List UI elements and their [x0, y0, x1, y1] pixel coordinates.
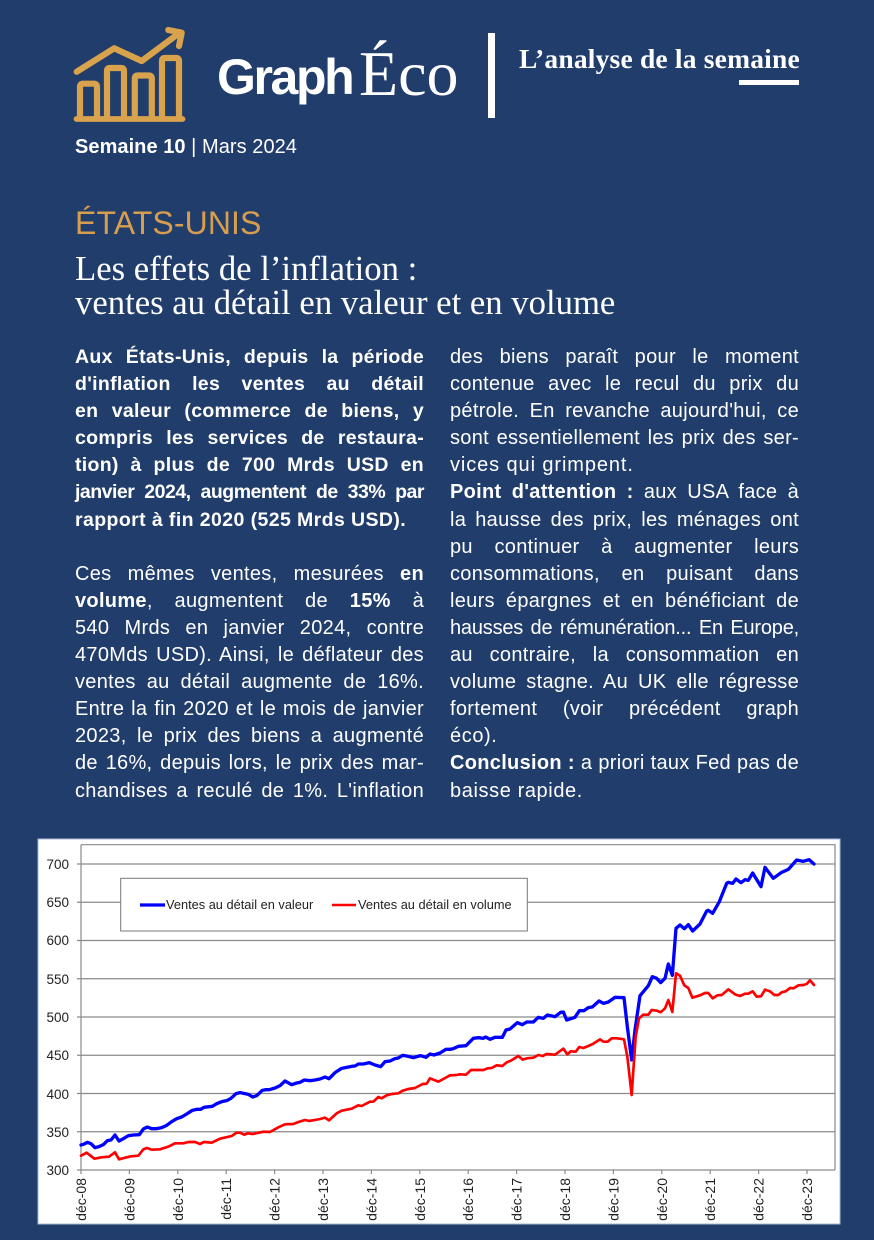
legend [121, 878, 527, 931]
y axis labels: 300 [46, 1163, 69, 1178]
x axis labels: déc-23 [799, 1178, 815, 1221]
y axis labels [46, 857, 69, 1178]
section heading: ÉTATS-UNIS [75, 205, 261, 241]
lead paragraph: rapport à fin 2020 (525 Mrds USD). [75, 509, 406, 531]
body paragraph: 540 Mrds en janvier 2024, contre [75, 617, 424, 639]
conclusion paragraph: Conclusion : a priori taux Fed pas de [450, 752, 799, 774]
body paragraph: Entre la fin 2020 et le mois de janvier [75, 698, 424, 720]
body paragraph: 470Mds USD). Ainsi, le déflateur des [75, 644, 424, 666]
point of attention paragraph: au contraire, la consommation en [450, 644, 799, 666]
point of attention paragraph: volume stagne. Au UK elle régresse [450, 671, 799, 693]
logo wordmark: Éco [359, 38, 458, 109]
inflation paragraph: sont essentiellement les prix des ser- [450, 427, 799, 449]
inflation paragraph: contenue avec le recul du prix du [450, 373, 799, 395]
point of attention paragraph: leurs épargnes et en bénéficiant de [450, 590, 799, 612]
y axis labels: 700 [46, 857, 69, 872]
x axis labels: déc-11 [218, 1178, 234, 1220]
logo wordmark [217, 38, 458, 109]
body paragraph: Ces mêmes ventes, mesurées en [75, 563, 424, 585]
x axis labels: déc-15 [412, 1178, 428, 1221]
y axis labels: 650 [46, 895, 69, 910]
y axis labels: 350 [46, 1125, 69, 1140]
text column: right [450, 346, 799, 802]
grid lines [77, 845, 835, 1174]
lead paragraph [74, 346, 424, 531]
x axis labels: déc-14 [363, 1178, 379, 1221]
x axis labels: déc-08 [73, 1178, 89, 1221]
x axis labels: déc-10 [170, 1178, 186, 1221]
body paragraph: ventes au détail augmente de 16%. [75, 671, 424, 693]
lead paragraph: janvier 2024, augmentent de 33% par [75, 481, 424, 503]
body paragraph [75, 563, 424, 802]
inflation paragraph [450, 346, 799, 476]
point of attention paragraph: Point d'attention : aux USA face à [450, 481, 799, 503]
x axis labels: déc-17 [509, 1178, 525, 1221]
conclusion paragraph: baisse rapide. [450, 780, 583, 802]
x axis labels: déc-12 [267, 1178, 283, 1221]
x axis labels: déc-21 [702, 1178, 718, 1221]
series: ventes en valeur [81, 860, 814, 1148]
title [75, 249, 615, 322]
title: Les effets de l’inflation : [75, 249, 417, 288]
body paragraph: de 16%, depuis lors, le prix des mar- [75, 752, 424, 774]
x axis labels: déc-09 [121, 1178, 137, 1221]
body paragraph: chandises a reculé de 1%. L'inflation [75, 780, 424, 802]
point of attention paragraph: pu continuer à augmenter leurs [450, 536, 799, 558]
x axis labels: déc-13 [315, 1178, 331, 1221]
body paragraph: volume, augmentent de 15% à [75, 590, 424, 612]
lead paragraph: tion) à plus de 700 Mrds USD en [75, 454, 424, 476]
x axis labels: déc-22 [751, 1178, 767, 1221]
y axis labels: 400 [46, 1087, 69, 1102]
y axis labels: 600 [46, 933, 69, 948]
lead paragraph: Aux États-Unis, depuis la période [75, 346, 424, 368]
inflation paragraph: des biens paraît pour le moment [450, 346, 799, 368]
conclusion paragraph [450, 752, 799, 802]
point of attention paragraph: éco). [450, 725, 497, 747]
vertical divider [488, 33, 495, 118]
logo wordmark: Graph [217, 49, 352, 105]
text column: left [74, 346, 424, 802]
inflation paragraph: pétrole. En revanche aujourd'hui, ce [450, 400, 799, 422]
x axis labels: déc-16 [460, 1178, 476, 1221]
header tagline: L’analyse de la semaine [519, 43, 800, 74]
lead paragraph: d'inflation les ventes au détail [75, 373, 424, 395]
y axis labels: 550 [46, 972, 69, 987]
title: ventes au détail en valeur et en volume [75, 283, 615, 322]
y axis labels: 450 [46, 1048, 69, 1063]
lead paragraph: compris les services de restaura- [75, 427, 424, 449]
point of attention paragraph [450, 481, 799, 747]
point of attention paragraph: la hausse des prix, les ménages ont [450, 509, 799, 531]
body paragraph: 2023, le prix des biens a augmenté [75, 725, 424, 747]
inflation paragraph: vices qui grimpent. [450, 454, 634, 476]
point of attention paragraph: consommations, en puisant dans [450, 563, 799, 585]
legend: Ventes au détail en valeur [166, 897, 314, 912]
lead paragraph: en valeur (commerce de biens, y [75, 400, 424, 422]
point of attention paragraph: fortement (voir précédent graph [450, 698, 799, 720]
chart background [38, 839, 840, 1224]
legend: Ventes au détail en volume [358, 897, 512, 912]
series: ventes en volume [81, 973, 814, 1159]
issue date: Semaine 10 | Mars 2024 [75, 136, 297, 158]
x axis labels [73, 1178, 815, 1221]
x axis labels: déc-18 [557, 1178, 573, 1221]
x axis labels: déc-20 [654, 1178, 670, 1221]
x axis labels: déc-19 [605, 1178, 621, 1221]
y axis labels: 500 [46, 1010, 69, 1025]
icon: gold bar chart logo with rising arrow [74, 26, 186, 122]
point of attention paragraph: hausses de rémunération... En Europe, [450, 617, 799, 639]
